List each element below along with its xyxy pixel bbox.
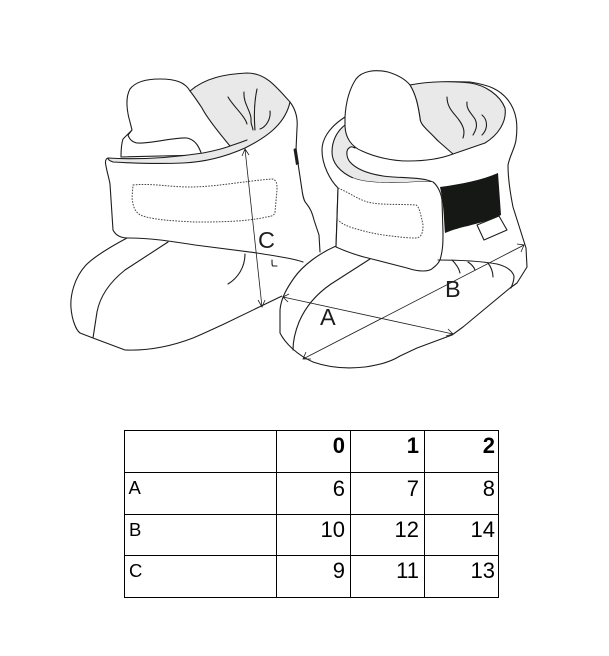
row A: 7	[407, 476, 419, 501]
right boot toe seam	[293, 259, 370, 350]
row B	[129, 517, 495, 542]
right boot outer body	[280, 82, 527, 368]
size table	[124, 430, 498, 598]
row B: 12	[395, 517, 419, 542]
left boot lining fold	[230, 140, 247, 146]
measurement arrow C	[242, 149, 265, 307]
row A: A	[128, 477, 142, 498]
row A: 6	[333, 476, 345, 501]
row C	[129, 558, 495, 583]
left boot tongue	[121, 79, 202, 157]
measurement arrow B	[303, 244, 524, 359]
right boot strap outline	[336, 182, 443, 271]
label C: C	[258, 227, 275, 253]
right boot tongue	[345, 71, 453, 161]
right boot white tab	[477, 216, 507, 240]
right boot creases	[452, 260, 493, 277]
row B: B	[129, 519, 141, 540]
left boot pull tab	[294, 148, 299, 165]
left boot crease	[228, 254, 245, 284]
row C: 13	[471, 558, 495, 583]
table header row: 0	[333, 433, 345, 458]
right boot black elastic	[440, 173, 501, 233]
left boot toe	[71, 238, 282, 350]
right boot sole line	[438, 260, 514, 288]
left boot heel outline	[290, 102, 320, 252]
left boot gray lining and sliver	[108, 73, 290, 163]
left boot dotted patch	[132, 179, 277, 222]
right boot gray lining	[410, 82, 505, 154]
left boot strap outline	[105, 158, 303, 262]
right boot dotted patch	[338, 188, 423, 238]
right boot	[280, 71, 527, 368]
row A	[128, 476, 495, 501]
row B: 14	[471, 517, 495, 542]
row B: 10	[321, 517, 345, 542]
left boot interior creases	[228, 89, 270, 130]
row A: 8	[483, 476, 495, 501]
table header row: 2	[483, 433, 495, 458]
right boot interior creases	[447, 97, 486, 138]
measurement arrow A	[283, 294, 453, 336]
left boot toe seam	[93, 242, 168, 338]
label B: B	[445, 276, 461, 302]
table grid	[124, 430, 498, 598]
table header row	[333, 433, 495, 458]
left boot small mark	[272, 260, 277, 266]
right boot gray collar	[332, 125, 433, 183]
row C: 11	[396, 558, 419, 583]
row C: C	[129, 560, 142, 581]
label A: A	[320, 304, 336, 330]
right boot strap fill	[336, 178, 443, 271]
left boot	[71, 73, 320, 350]
row C: 9	[333, 558, 345, 583]
table header row: 1	[407, 433, 419, 458]
